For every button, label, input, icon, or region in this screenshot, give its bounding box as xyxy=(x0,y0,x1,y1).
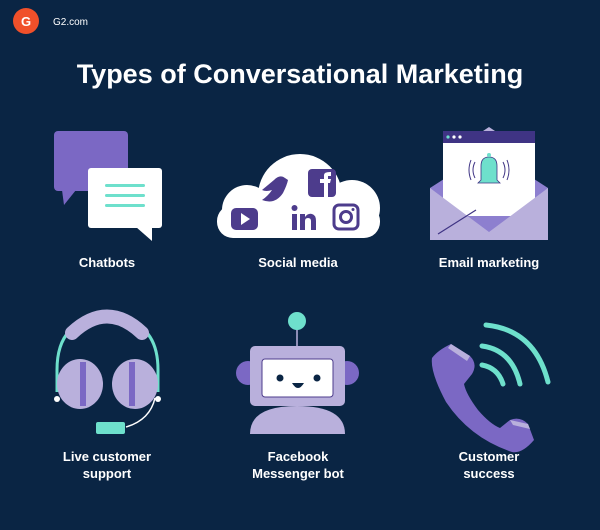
label: customer success: Customer xyxy=(459,449,519,464)
label: social media: Social media xyxy=(258,255,339,270)
icon: phone xyxy=(432,325,548,452)
icon: headset xyxy=(54,316,161,434)
label: email marketing: Email marketing xyxy=(439,255,539,270)
label: chatbots: Chatbots xyxy=(79,255,135,270)
label: facebook messenger bot: Messenger bot xyxy=(252,466,345,481)
label: facebook messenger bot: Facebook xyxy=(268,449,329,464)
logo: G2: G xyxy=(21,14,31,29)
logo: G2: G2.com xyxy=(53,17,88,28)
icon: email envelope xyxy=(430,127,548,240)
label: live customer support: Live customer xyxy=(63,449,151,464)
label: live customer support: support xyxy=(83,466,132,481)
logo: G2 xyxy=(13,8,88,34)
icon: robot xyxy=(236,312,359,434)
icon: social cloud xyxy=(217,154,380,238)
icon: chat bubbles xyxy=(54,131,162,241)
title: Types of Conversational Marketing xyxy=(77,59,523,89)
label: customer success: success xyxy=(463,466,515,481)
